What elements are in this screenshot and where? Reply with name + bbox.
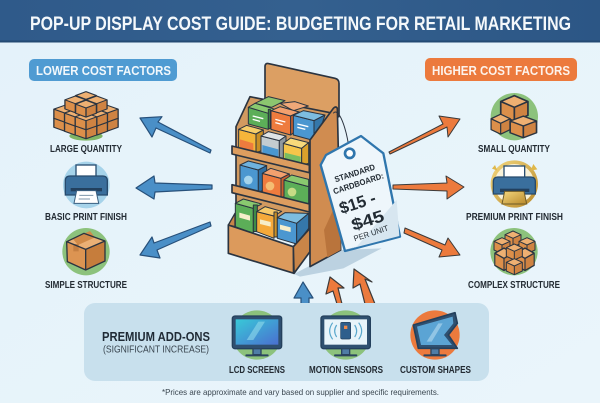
label: complex structure: COMPLEX STRUCTURE	[468, 279, 560, 291]
tag text: CARDBOARD:	[332, 170, 385, 196]
arrow: premium print (orange)	[393, 176, 464, 199]
price tag	[321, 112, 400, 251]
label: basic print finish: BASIC PRINT FINISH	[45, 211, 127, 223]
arrow: add-ons up (orange left)	[326, 277, 344, 304]
icon: LCD monitor	[232, 310, 282, 360]
arrow: basic print (blue)	[136, 176, 212, 199]
icon: complex structure cubes	[490, 228, 538, 275]
lower shelf	[232, 185, 309, 212]
header banner	[0, 0, 600, 42]
inner back	[236, 97, 333, 250]
label: motion sensors: MOTION SENSORS	[309, 364, 383, 376]
icon: basic printer	[63, 162, 110, 208]
second row products	[239, 125, 309, 165]
panel: premium add-ons	[84, 303, 489, 381]
pill: higher cost factors	[425, 58, 577, 81]
heading: premium add-ons: PREMIUM ADD-ONS	[102, 329, 210, 344]
tag text: $45	[349, 206, 387, 235]
arrow: complex structure (orange)	[404, 228, 460, 257]
arrow: simple structure (blue)	[140, 222, 211, 258]
arrow: large quantity (blue)	[140, 117, 211, 153]
tag text: STANDARD	[333, 162, 376, 184]
tag text: PER UNIT	[353, 224, 390, 243]
ground shadow	[294, 248, 382, 277]
back header panel	[265, 63, 339, 117]
icon: simple box	[62, 228, 110, 275]
tag text	[332, 162, 390, 243]
top row products	[248, 97, 325, 141]
tag eyelet	[345, 149, 354, 158]
bottom row products	[235, 199, 309, 244]
tag text: $15 -	[337, 188, 378, 218]
label: LCD screens: LCD SCREENS	[229, 364, 285, 376]
label: small quantity: SMALL QUANTITY	[478, 143, 550, 155]
icon: motion sensor monitor	[321, 310, 370, 360]
pill: lower cost factors	[29, 59, 177, 81]
label: simple structure: SIMPLE STRUCTURE	[45, 279, 127, 291]
subheading: (SIGNIFICANT INCREASE)	[103, 344, 209, 356]
footnote: *Prices are approximate and vary based on supplier and specific requirements.	[162, 387, 439, 397]
tag body	[321, 136, 400, 251]
label: custom shapes: CUSTOM SHAPES	[400, 364, 471, 376]
bottom tray front	[228, 225, 310, 273]
arrow: add-ons up (blue)	[294, 282, 313, 304]
icon: small quantity boxes	[491, 93, 538, 140]
arrow: add-ons up (orange right)	[353, 269, 375, 304]
pill: lower cost factors: LOWER COST FACTORS	[36, 64, 171, 78]
icon: large quantity boxes	[54, 92, 118, 141]
third row products	[240, 161, 309, 204]
pill: higher cost factors: HIGHER COST FACTORS	[432, 64, 570, 78]
right side panel	[310, 107, 341, 267]
display stand with shelves	[228, 63, 382, 277]
icon: custom shape monitor	[410, 310, 460, 360]
arrow: small quantity (orange)	[389, 116, 460, 154]
label: large quantity: LARGE QUANTITY	[50, 143, 122, 155]
middle shelf	[232, 146, 309, 173]
icon: premium printer	[491, 160, 538, 208]
label: premium print finish: PREMIUM PRINT FINISH	[466, 211, 563, 223]
